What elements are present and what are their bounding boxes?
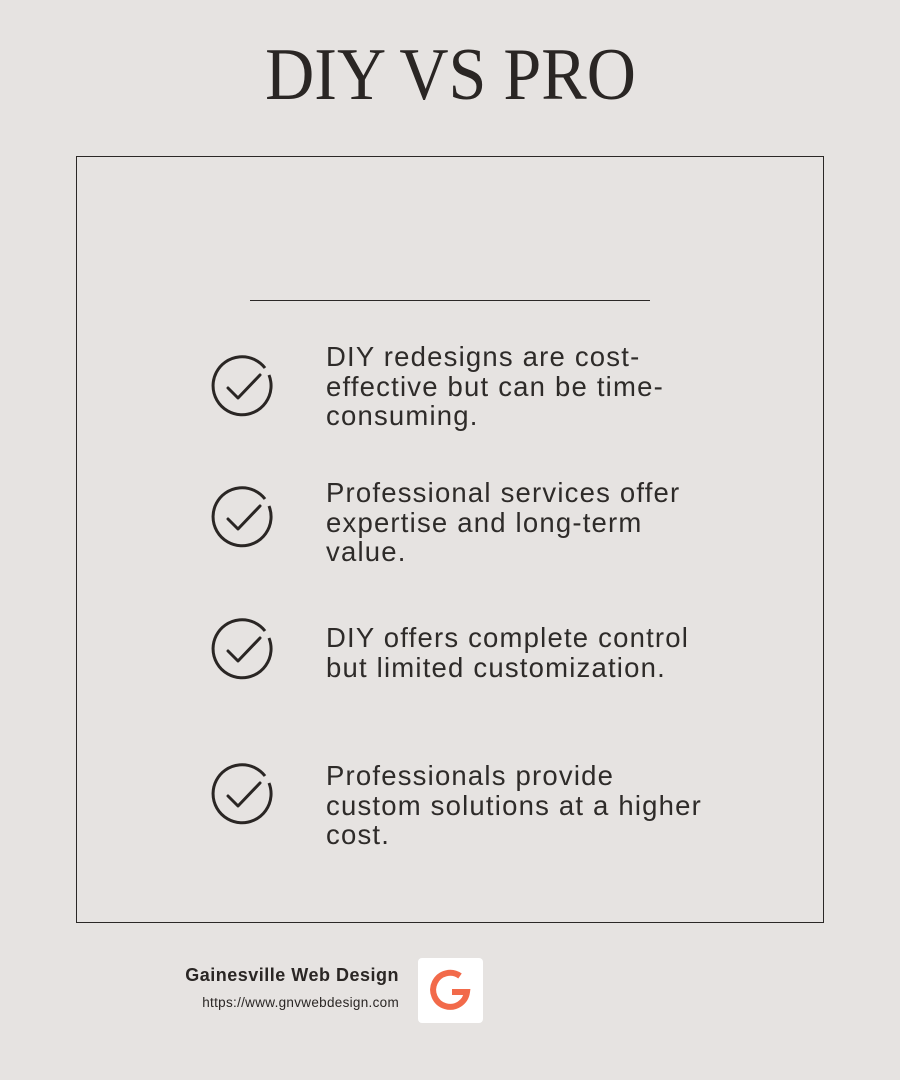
text 4: cost. (326, 819, 390, 850)
text 1 (326, 341, 664, 431)
text 4 (326, 760, 702, 850)
text 2 (326, 477, 680, 567)
icon: check 2 (212, 486, 273, 548)
text 1: DIY redesigns are cost- (326, 341, 640, 372)
divider line (250, 300, 650, 301)
footer: company name: Gainesville Web Design (185, 965, 399, 985)
icon: check 3 (212, 618, 273, 680)
logo (418, 958, 483, 1023)
text 3 (326, 622, 689, 682)
text 2: value. (326, 536, 407, 567)
text 2: expertise and long-term (326, 506, 642, 538)
icon: check 4 (212, 763, 273, 824)
text 1: consuming. (326, 400, 479, 431)
text 4: custom solutions at a higher (326, 790, 702, 820)
footer: url: https://www.gnvwebdesign.com (202, 995, 399, 1010)
icon: check 1 (212, 355, 273, 416)
text 3: but limited customization. (326, 652, 666, 682)
text 2: Professional services offer (326, 477, 680, 508)
text 1: effective but can be time- (326, 370, 664, 402)
panel: main frame (76, 156, 824, 923)
text 3: DIY offers complete control (326, 622, 689, 653)
title: DIY VS PRO (265, 34, 635, 116)
text 4: Professionals provide (326, 760, 614, 791)
